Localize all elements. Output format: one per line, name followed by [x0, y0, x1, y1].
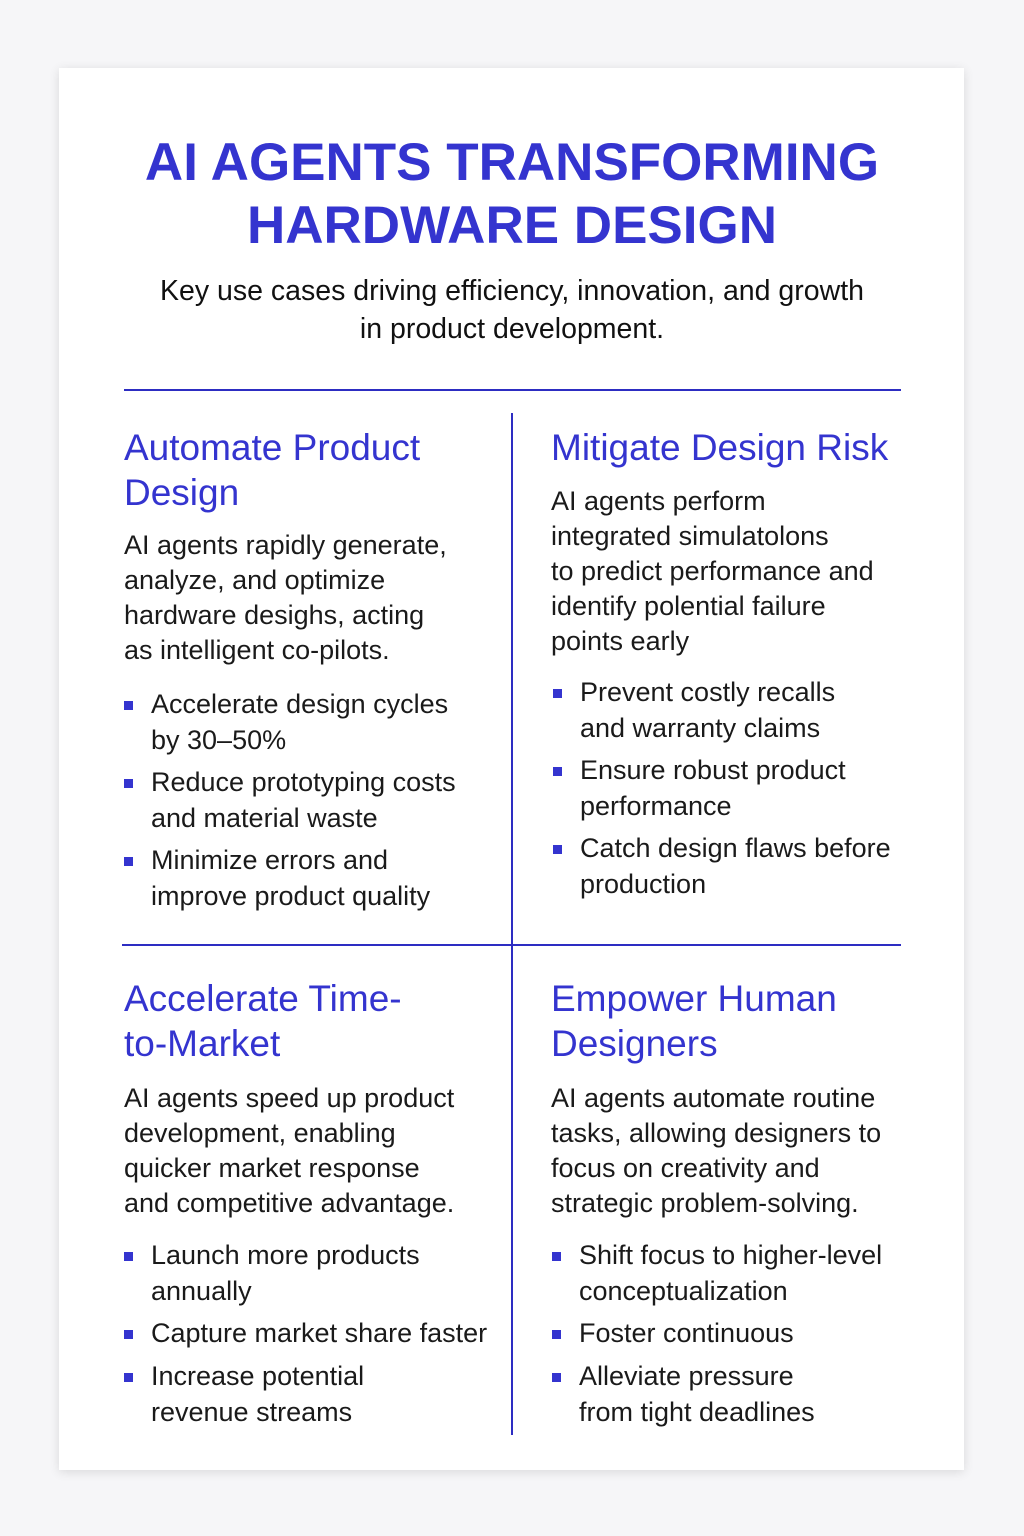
- body text: AI agents automate routine: [551, 1083, 875, 1113]
- body text: AI agents rapidly generate,: [124, 530, 447, 560]
- body text: [551, 1083, 881, 1218]
- body text: [551, 486, 874, 656]
- body text: [124, 530, 447, 665]
- bullet list: by 30–50%: [151, 724, 286, 754]
- heading: [124, 978, 402, 1064]
- bullet list: from tight deadlines: [579, 1396, 815, 1426]
- bullet list: Minimize errors and: [151, 845, 388, 875]
- body text: integrated simulatolons: [551, 521, 829, 551]
- bullet list: Launch more products: [151, 1240, 420, 1270]
- heading: to-Market: [124, 1023, 280, 1064]
- heading: Mitigate Design Risk: [551, 427, 888, 468]
- heading: Designers: [551, 1023, 718, 1064]
- body text: and competitive advantage.: [124, 1188, 454, 1218]
- title: HARDWARE DESIGN: [247, 196, 777, 255]
- bullet list: Increase potential: [151, 1361, 364, 1391]
- heading: [551, 978, 837, 1064]
- body text: hardware desighs, acting: [124, 600, 424, 630]
- bullet list: Capture market share faster: [151, 1318, 487, 1348]
- heading: Accelerate Time-: [124, 978, 402, 1019]
- body text: quicker market response: [124, 1153, 420, 1183]
- body text: tasks, allowing designers to: [551, 1118, 881, 1148]
- heading: Empower Human: [551, 978, 837, 1019]
- panel: accelerate time-to-market: [124, 978, 487, 1426]
- subtitle: Key use cases driving efficiency, innovation, and growth: [160, 275, 864, 307]
- bullet list: and material waste: [151, 802, 378, 832]
- bullet list: revenue streams: [151, 1396, 352, 1426]
- subtitle: [160, 275, 864, 345]
- bullet list: Ensure robust product: [580, 755, 846, 785]
- bullet list: improve product quality: [151, 880, 430, 910]
- body text: focus on creativity and: [551, 1153, 820, 1183]
- heading: Automate Product: [124, 427, 420, 468]
- body text: strategic problem-solving.: [551, 1188, 859, 1218]
- panel: automate product design: [124, 427, 456, 910]
- body text: as intelligent co-pilots.: [124, 635, 390, 665]
- panel: empower human designers: [551, 978, 882, 1426]
- body text: development, enabling: [124, 1118, 396, 1148]
- body text: analyze, and optimize: [124, 565, 385, 595]
- body text: identify polential failure: [551, 591, 826, 621]
- bullet list: [553, 677, 891, 898]
- body text: AI agents speed up product: [124, 1083, 454, 1113]
- heading: Design: [124, 472, 239, 513]
- bullet list: performance: [580, 790, 732, 820]
- bullet list: Reduce prototyping costs: [151, 767, 456, 797]
- bullet list: [552, 1240, 882, 1426]
- panel: mitigate design risk: [551, 427, 891, 898]
- body text: points early: [551, 626, 689, 656]
- title: AI AGENTS TRANSFORMING: [145, 133, 879, 192]
- subtitle: in product development.: [360, 313, 664, 345]
- bullet list: Catch design flaws before: [580, 833, 891, 863]
- bullet list: conceptualization: [579, 1276, 788, 1306]
- bullet list: Shift focus to higher-level: [579, 1240, 882, 1270]
- bullet list: Foster continuous: [579, 1318, 794, 1348]
- heading: [124, 427, 420, 513]
- bullet list: production: [580, 868, 706, 898]
- bullet list: [124, 1240, 487, 1426]
- bullet list: annually: [151, 1276, 252, 1306]
- body text: [124, 1083, 454, 1218]
- body text: AI agents perform: [551, 486, 766, 516]
- bullet list: and warranty claims: [580, 712, 820, 742]
- body text: to predict performance and: [551, 556, 874, 586]
- bullet list: [124, 689, 456, 910]
- title: [145, 133, 879, 255]
- bullet list: Accelerate design cycles: [151, 689, 448, 719]
- bullet list: Alleviate pressure: [579, 1361, 794, 1391]
- bullet list: Prevent costly recalls: [580, 677, 835, 707]
